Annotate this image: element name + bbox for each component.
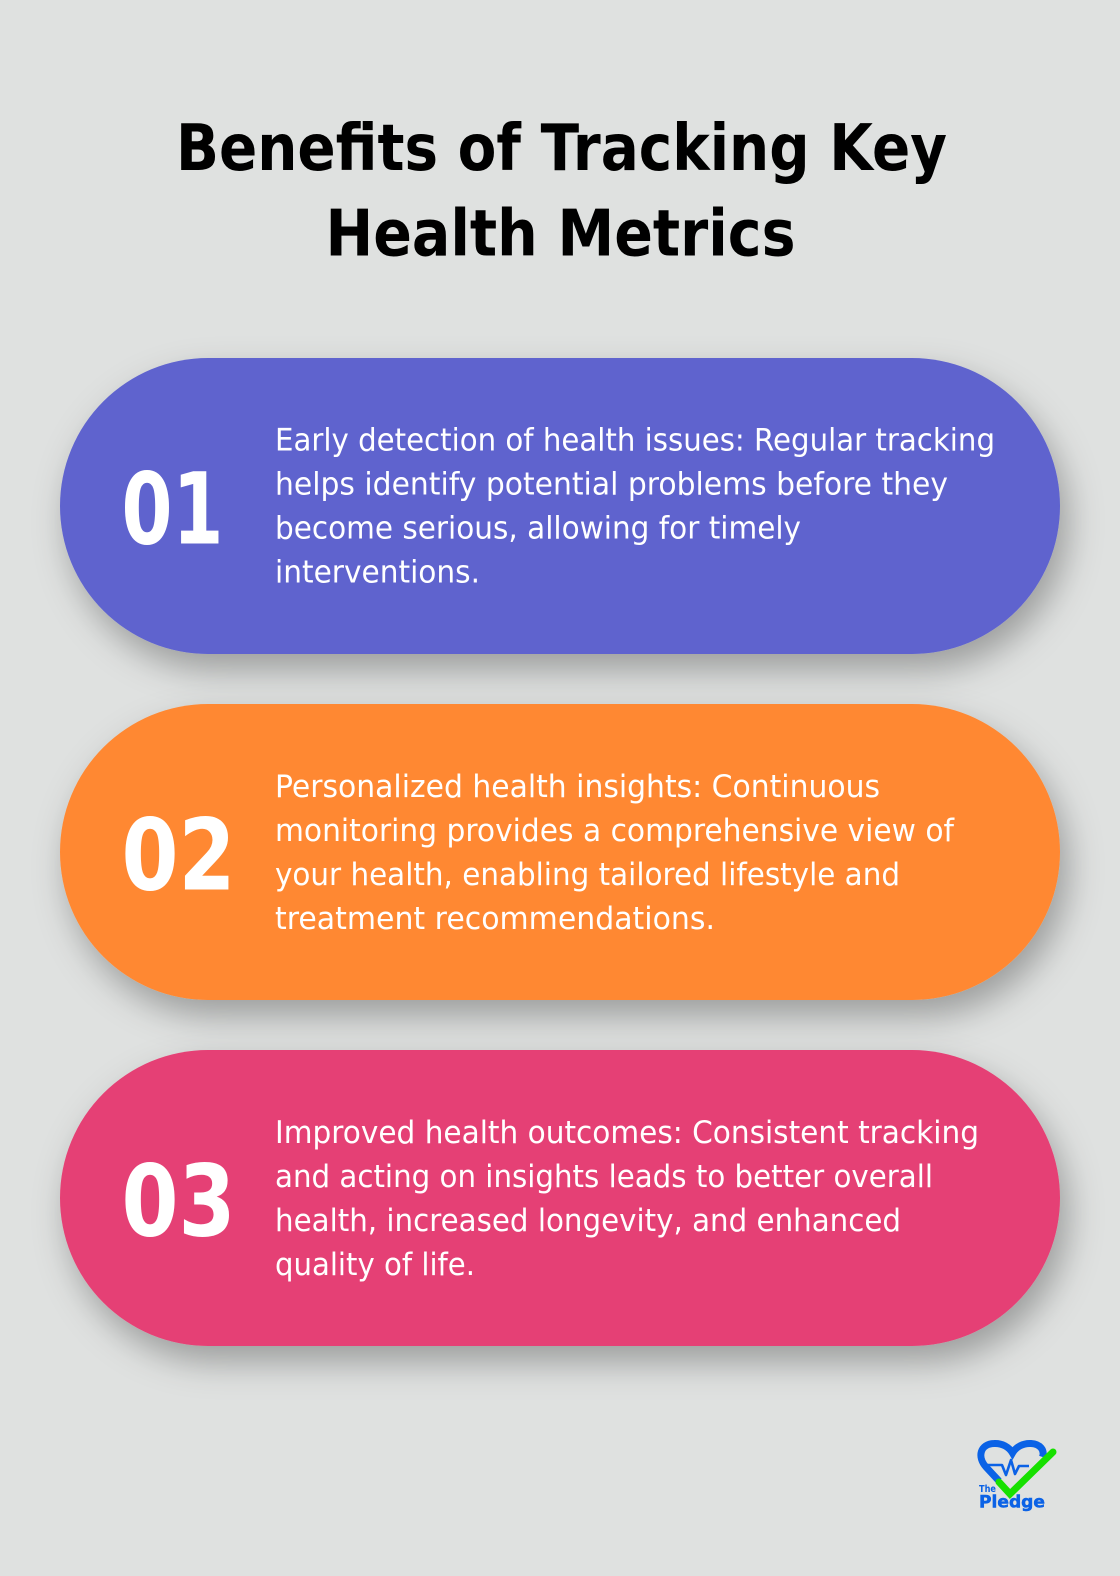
text block 02: Personalized health insights: Continuous: [275, 769, 880, 805]
text block 01: Early detection of health issues: Regular tracking: [275, 422, 995, 458]
text block 01: interventions.: [275, 555, 480, 591]
number 01: 01: [122, 452, 224, 568]
icon: The Pledge logo: [979, 1443, 1053, 1513]
pill background 03: [60, 1050, 1060, 1346]
text block 01: helps identify potential problems before they: [275, 467, 948, 503]
heartbeat line: [988, 1460, 1029, 1475]
number 03: 03: [122, 1144, 236, 1260]
panel: card 03 improved outcomes: [60, 1050, 1060, 1346]
panel: card 02 personalized insights: [60, 704, 1060, 1000]
text block 02: [275, 769, 955, 937]
logo wordmark: Pledge: [979, 1493, 1045, 1513]
text block 02: monitoring provides a comprehensive view of: [275, 813, 955, 849]
panel: card 01 early detection: [60, 358, 1060, 654]
title: [176, 111, 947, 272]
text block 01: [275, 422, 995, 591]
logo wordmark: [979, 1484, 1045, 1513]
title: Health Metrics: [326, 196, 796, 272]
text block 03: health, increased longevity, and enhanced: [275, 1203, 901, 1239]
text block 03: quality of life.: [275, 1247, 475, 1283]
text block 02: your health, enabling tailored lifestyle and: [275, 857, 900, 893]
number 02: 02: [122, 798, 236, 914]
title: Benefits of Tracking Key: [176, 111, 947, 186]
text block 03: Improved health outcomes: Consistent tracking: [275, 1115, 979, 1151]
pill background 01: [60, 358, 1060, 654]
text block 03: and acting on insights leads to better overall: [275, 1159, 933, 1195]
logo wordmark: The: [979, 1484, 996, 1495]
heart outline: [981, 1443, 1043, 1481]
check mark: [999, 1452, 1053, 1494]
pill background 02: [60, 704, 1060, 1000]
text block 02: treatment recommendations.: [275, 901, 715, 937]
text block 01: become serious, allowing for timely: [275, 511, 801, 547]
text block 03: [275, 1115, 979, 1283]
